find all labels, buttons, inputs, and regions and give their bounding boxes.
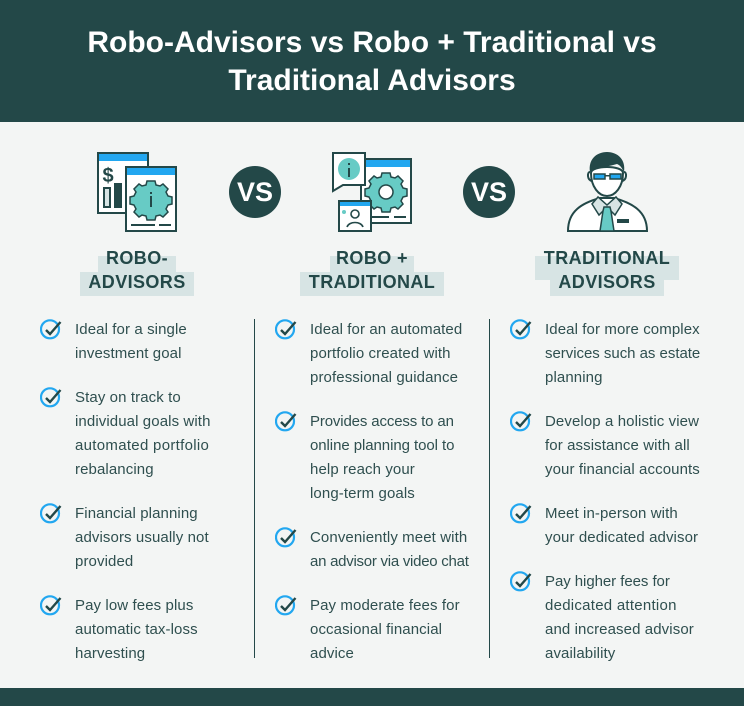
bullet text: advice [310, 645, 354, 662]
bullet text: rebalancing [75, 461, 154, 478]
check icon [40, 319, 62, 340]
bullet text: individual goals with [75, 413, 211, 430]
bullet text [545, 413, 700, 478]
list: robo + traditional [275, 319, 469, 662]
check icon [510, 503, 532, 524]
check icon [510, 319, 532, 340]
bullet text [310, 529, 469, 570]
bullet text: long-term goals [310, 485, 415, 502]
list: traditional advisors [510, 319, 700, 662]
check icon [510, 571, 532, 592]
check icon [275, 527, 296, 548]
heading: robo + traditional: ROBO + [336, 248, 408, 268]
bullet text: help reach your [310, 461, 415, 478]
check icon [40, 503, 62, 524]
bullet text: services such as estate [545, 345, 700, 362]
bullet text [75, 597, 198, 662]
bullet text: your financial accounts [545, 461, 700, 478]
bullet text [310, 413, 454, 502]
list: robo-advisors [40, 319, 211, 662]
bullet text: portfolio created with [310, 345, 451, 362]
bullet text: your dedicated advisor [545, 529, 698, 546]
icon: traditional advisor person [567, 152, 648, 232]
bullet text: Meet in-person with [545, 505, 678, 522]
icon: robo-advisor documents [97, 152, 177, 232]
bullet text: Ideal for an automated [310, 321, 462, 338]
bullet text: Develop a holistic view [545, 413, 699, 430]
heading: robo-advisors: ADVISORS [88, 272, 186, 292]
check icon [510, 411, 532, 432]
column divider left [254, 319, 255, 658]
bullet text: provided [75, 553, 133, 570]
bullet text: for assistance with all [545, 437, 690, 454]
bullet text [75, 321, 187, 362]
footer band [0, 688, 744, 706]
title: Robo-Advisors vs Robo + Traditional vs [87, 26, 657, 59]
check icon [275, 411, 296, 432]
bullet text [545, 505, 698, 546]
vs badge left [229, 166, 281, 218]
heading: robo + traditional: TRADITIONAL [309, 272, 435, 292]
icon: robo plus traditional [332, 152, 412, 232]
heading: traditional advisors: TRADITIONAL [544, 248, 670, 268]
bullet text [75, 505, 209, 570]
bullet text: advisors usually not [75, 529, 209, 546]
check icon [40, 595, 62, 616]
bullet text [310, 321, 462, 386]
bullet text: Stay on track to [75, 389, 181, 406]
header banner [0, 0, 744, 122]
vs badge left: VS [237, 177, 273, 207]
bullet text: Financial planning [75, 505, 198, 522]
bullet text [545, 573, 694, 662]
bullet text: Pay higher fees for [545, 573, 670, 590]
bullet text: Ideal for more complex [545, 321, 700, 338]
bullet text: occasional financial [310, 621, 442, 638]
bullet text: Provides access to an [310, 413, 454, 430]
bullet text: Conveniently meet with [310, 529, 467, 546]
check icon [275, 319, 296, 340]
heading: traditional advisors [535, 248, 679, 296]
column divider right [489, 319, 490, 658]
bullet text: availability [545, 645, 615, 662]
bullet text: automated portfolio [75, 437, 209, 454]
bullet text: planning [545, 369, 603, 386]
heading: traditional advisors: ADVISORS [558, 272, 656, 292]
check icon [40, 387, 62, 408]
check icon [275, 595, 296, 616]
title [87, 26, 657, 97]
bullet text: professional guidance [310, 369, 458, 386]
bullet text: and increased advisor [545, 621, 694, 638]
bullet text: Pay moderate fees for [310, 597, 460, 614]
bullet text [310, 597, 460, 662]
icon: robo-advisor documents: $ [102, 165, 114, 187]
bullet text: investment goal [75, 345, 182, 362]
heading: robo-advisors: ROBO- [106, 248, 168, 268]
bullet text: dedicated attention [545, 597, 677, 614]
bullet text: an advisor via video chat [310, 553, 469, 570]
bullet text: harvesting [75, 645, 145, 662]
bullet text [75, 389, 211, 478]
heading: robo-advisors [80, 248, 194, 296]
bullet text [545, 321, 700, 386]
vs badge right: VS [471, 177, 507, 207]
bullet text: Ideal for a single [75, 321, 187, 338]
bullet text: Pay low fees plus [75, 597, 193, 614]
vs badge right [463, 166, 515, 218]
bullet text: automatic tax-loss [75, 621, 198, 638]
bullet text: online planning tool to [310, 437, 454, 454]
title: Traditional Advisors [228, 64, 516, 97]
heading: robo + traditional [300, 248, 444, 296]
